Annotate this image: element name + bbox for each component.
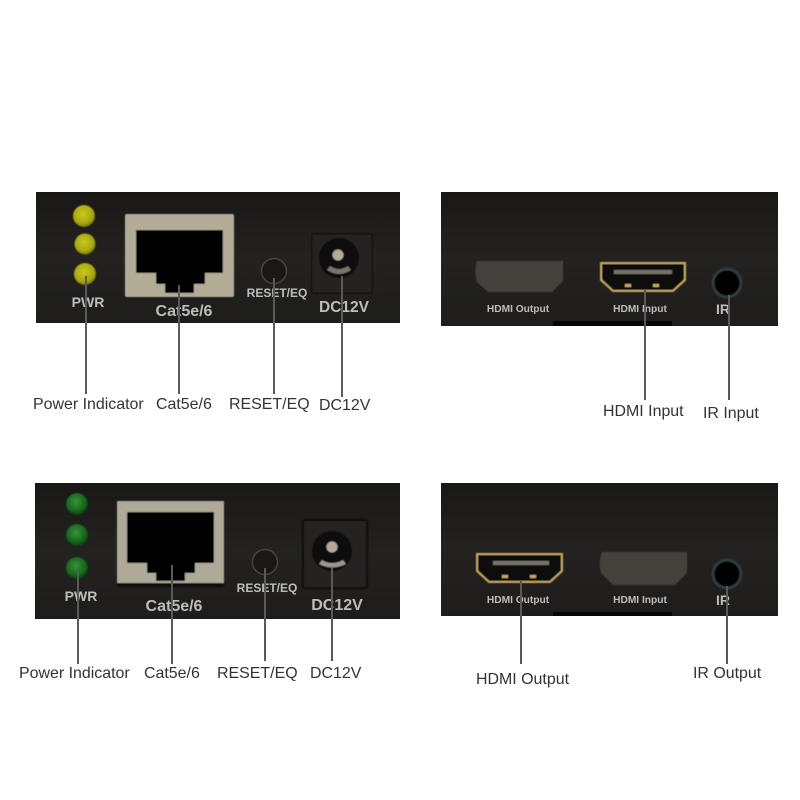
callout: HDMI Output: [476, 580, 570, 688]
callout: DC12V, bottom: DC12V: [310, 665, 362, 682]
Cat5e/6 port label: Cat5e/6: [156, 303, 213, 320]
callout: RESET/EQ, bottom: [217, 568, 298, 682]
panel: top left receiver ports: [36, 192, 400, 323]
callout: Cat5e/6, bottom: [144, 565, 200, 682]
Cat5e/6 port: [117, 501, 224, 587]
HDMI output label: HDMI Output: [487, 304, 550, 315]
callout: Power Indicator, top: [33, 276, 144, 413]
RESET/EQ label: RESET/EQ: [247, 286, 307, 300]
RESET/EQ label: RESET/EQ: [237, 581, 297, 595]
Cat5e/6 port label: Cat5e/6: [146, 598, 203, 615]
callout: HDMI Input: [603, 290, 684, 420]
indicator LEDs, green: [66, 493, 88, 579]
Cat5e/6 port: [125, 214, 234, 297]
HDMI input port, covered: [600, 552, 687, 585]
callout: IR Output: [693, 586, 762, 682]
callout: Power Indicator, top: Power Indicator: [33, 396, 144, 413]
HDMI input label: HDMI Input: [613, 304, 667, 315]
HDMI output port, covered: [476, 261, 563, 292]
IR jack: [713, 269, 741, 297]
callout: Power Indicator, bottom: Power Indicator: [19, 665, 130, 682]
callout: DC12V, bottom: [310, 568, 362, 682]
IR label: IR: [716, 301, 730, 317]
IR jack: [713, 560, 741, 588]
HDMI input port, gold: [601, 263, 685, 291]
indicator LEDs, yellow: [73, 205, 96, 285]
panel: bottom left transmitter ports: [35, 483, 400, 619]
panel: bottom right transmitter ports: [441, 483, 778, 616]
PWR label: PWR: [72, 294, 104, 310]
DC power jack: [312, 234, 372, 293]
callout: HDMI Input: HDMI Input: [603, 403, 684, 420]
callout: IR Output: IR Output: [693, 665, 762, 682]
callout: Cat5e/6, top: Cat5e/6: [156, 396, 212, 413]
callout: RESET/EQ, top: [229, 278, 310, 413]
bottom notch: [553, 321, 672, 326]
DC12V label: DC12V: [319, 299, 370, 316]
callout: IR Input: [703, 295, 759, 422]
DC power jack: [303, 520, 367, 588]
callout: DC12V, top: [319, 276, 371, 414]
bottom notch: [553, 612, 672, 616]
DC12V label: DC12V: [311, 597, 363, 614]
IR label: IR: [716, 592, 730, 608]
callout: HDMI Output: HDMI Output: [476, 671, 570, 688]
callout: RESET/EQ, top: RESET/EQ: [229, 396, 310, 413]
PWR label: PWR: [65, 588, 97, 604]
callout: Cat5e/6, top: [156, 285, 212, 413]
HDMI output label: HDMI Output: [487, 595, 550, 606]
callout: IR Input: IR Input: [703, 405, 759, 422]
callout: Power Indicator, bottom: [19, 570, 130, 682]
HDMI input label: HDMI Input: [613, 595, 667, 606]
panel: top right receiver ports: [441, 192, 778, 326]
callout: RESET/EQ, bottom: RESET/EQ: [217, 665, 298, 682]
reset button: [252, 550, 278, 574]
HDMI output port, gold: [477, 554, 562, 582]
callout: DC12V, top: DC12V: [319, 397, 371, 414]
reset button: [262, 258, 286, 284]
callout: Cat5e/6, bottom: Cat5e/6: [144, 665, 200, 682]
